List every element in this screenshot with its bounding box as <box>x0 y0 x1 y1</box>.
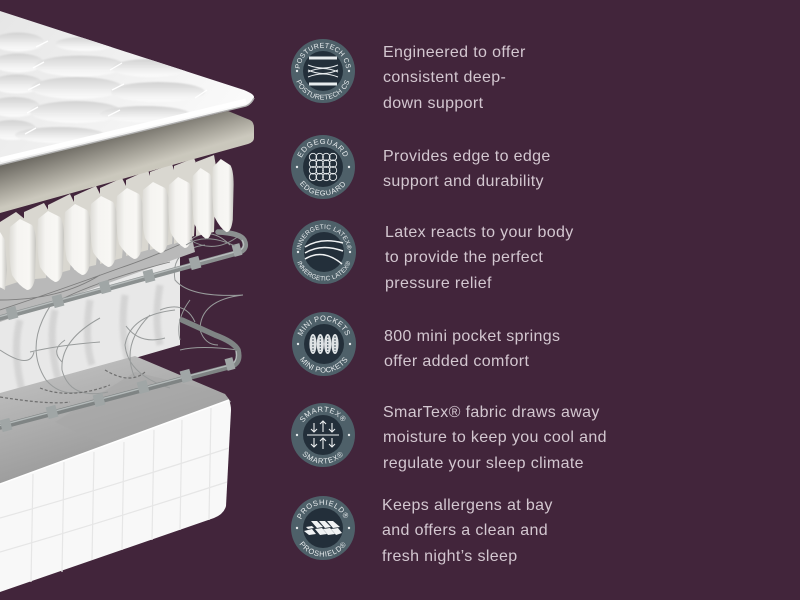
base quilted side panel <box>0 400 231 592</box>
icon: ProShield badge: PROSHIELD® <box>296 500 348 520</box>
icon: Innergetic Latex badge <box>292 220 356 284</box>
icon: Innergetic Latex badge: INNERGETIC LATEX® <box>297 261 350 281</box>
text: Mini Pockets: 800 mini pocket springs <box>384 328 560 345</box>
icon: PostureTech CS badge: POSTURETECH CS <box>295 42 351 68</box>
text: Innergetic Latex: to provide the perfect <box>385 249 543 266</box>
pocket springs, back row <box>0 155 216 288</box>
text: ProShield: and offers a clean and <box>382 522 548 539</box>
text: PostureTech CS: down support <box>383 95 483 112</box>
text: Innergetic Latex: pressure relief <box>385 275 492 292</box>
icon: SmarTex badge: SMARTEX® <box>302 452 342 464</box>
icon: PostureTech CS badge <box>291 39 355 103</box>
text: PostureTech CS <box>383 44 526 112</box>
spring base band <box>0 228 195 322</box>
icon: PostureTech CS badge: POSTURETECH CS <box>296 80 350 100</box>
icon: EdgeGuard badge: EDGEGUARD <box>300 180 345 196</box>
icon: Mini Pockets badge: MINI POCKETS <box>298 316 350 336</box>
text: PostureTech CS: consistent deep- <box>383 69 506 86</box>
text: Innergetic Latex: Latex reacts to your body <box>385 224 574 241</box>
icon: ProShield badge: PROSHIELD® <box>300 541 346 557</box>
mattress cutaway illustration <box>0 11 254 592</box>
icon: Mini Pockets badge: MINI POCKETS <box>300 356 348 373</box>
text: SmarTex: SmarTex® fabric draws away <box>383 404 600 421</box>
text: Mini Pockets <box>384 328 560 370</box>
icon: Innergetic Latex badge: INNERGETIC LATEX® <box>296 224 352 250</box>
text: PostureTech CS: Engineered to offer <box>383 44 526 61</box>
base floor panel <box>0 356 231 484</box>
text: Mini Pockets: offer added comfort <box>384 353 529 370</box>
text: SmarTex: moisture to keep you cool and <box>383 429 607 446</box>
text: ProShield <box>382 497 553 565</box>
text: ProShield: fresh night’s sleep <box>382 548 518 565</box>
text: EdgeGuard: Provides edge to edge <box>383 148 551 165</box>
icon: EdgeGuard badge: EDGEGUARD <box>297 138 348 158</box>
coils over the top of the upper rail <box>186 235 240 246</box>
text: EdgeGuard: support and durability <box>383 173 544 190</box>
quilted top layer <box>0 11 254 165</box>
lower coil wires <box>0 234 243 394</box>
pocket springs, front row <box>0 159 234 290</box>
bed: lower spring backing panel <box>0 235 180 395</box>
icon: ProShield badge <box>291 496 355 560</box>
icon: Mini Pockets badge <box>292 312 356 376</box>
icon: SmarTex badge <box>291 403 355 467</box>
icon: SmarTex badge: SMARTEX® <box>300 406 346 422</box>
upper wire frame rail <box>0 232 245 320</box>
foam comfort layer <box>0 111 254 213</box>
text: SmarTex <box>383 404 607 472</box>
lower wire frame rail <box>0 320 239 432</box>
text: SmarTex: regulate your sleep climate <box>383 455 584 472</box>
text: Innergetic Latex <box>385 224 574 292</box>
panel: features list <box>291 39 607 565</box>
quilting pattern <box>0 32 207 143</box>
text: ProShield: Keeps allergens at bay <box>382 497 553 514</box>
text: EdgeGuard <box>383 148 551 190</box>
icon: EdgeGuard badge <box>291 135 355 199</box>
